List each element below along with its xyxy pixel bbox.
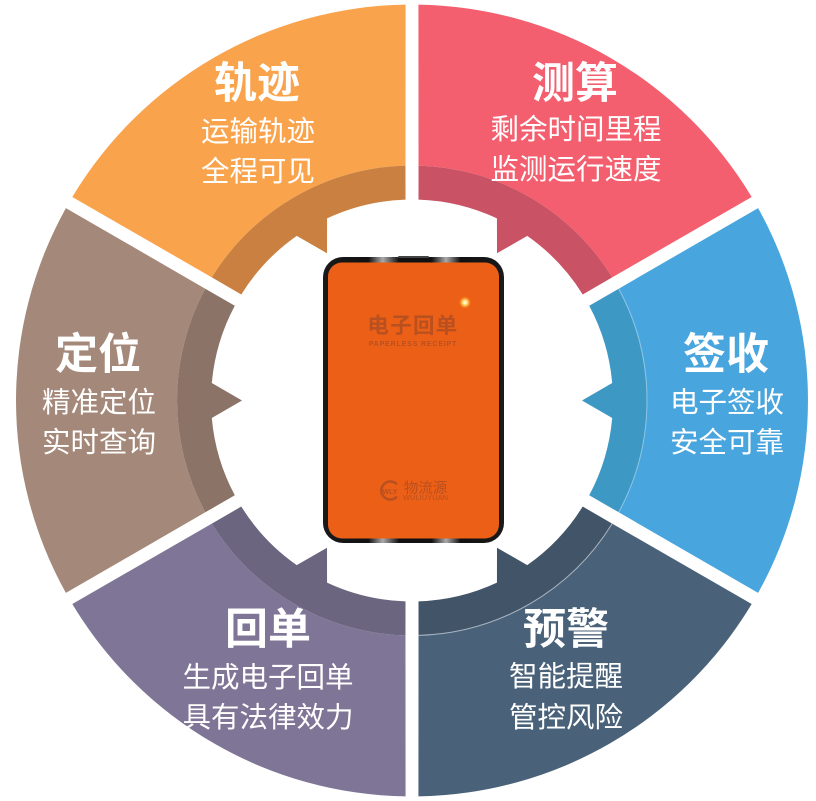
text: 运输轨迹 全程可见	[201, 116, 315, 188]
sector shape: 预警	[349, 483, 777, 801]
text: 剩余时间里程 监测运行速度: 剩余时间里程	[490, 114, 662, 146]
panel: 签收 sector	[582, 208, 808, 593]
panel: 轨迹 sector	[47, 0, 475, 318]
heading: 签收: 签收	[683, 331, 769, 379]
arrow ring: 测算	[400, 141, 626, 309]
heading: 轨迹: 轨迹	[214, 60, 300, 108]
panel: 测算 sector	[349, 0, 777, 318]
text: 电子签收 安全可靠: 安全可靠	[670, 427, 784, 459]
device face	[328, 262, 499, 538]
heading: 预警: 预警	[523, 606, 609, 654]
indicator light	[458, 296, 472, 309]
heading: 定位: 定位	[55, 331, 141, 379]
text: 电子签收 安全可靠: 电子签收	[670, 387, 784, 419]
text: 生成电子回单 具有法律效力: 具有法律效力	[182, 702, 354, 734]
arrow ring: 回单	[198, 492, 424, 660]
sector shape: 回单	[47, 483, 475, 801]
text: 智能提醒 管控风险: 智能提醒	[509, 661, 623, 693]
text: 运输轨迹 全程可见: 运输轨迹	[201, 116, 315, 148]
logo: WLY mark	[381, 482, 398, 499]
logo text: 物流源	[404, 480, 448, 497]
arrow ring: 定位	[177, 289, 242, 512]
text: 智能提醒 管控风险	[509, 661, 623, 734]
device: orange electronic receipt terminal	[323, 256, 504, 543]
text: 精准定位 实时查询	[42, 387, 156, 459]
text: 剩余时间里程 监测运行速度	[490, 114, 662, 186]
text: 剩余时间里程 监测运行速度: 监测运行速度	[490, 154, 662, 186]
sector shape: 签收	[619, 208, 808, 593]
text: 智能提醒 管控风险: 管控风险	[509, 702, 623, 734]
arrow ring: 签收	[582, 289, 647, 512]
device bezel	[323, 257, 504, 543]
text: 生成电子回单 具有法律效力: 生成电子回单	[182, 662, 354, 694]
heading: 回单: 回单	[225, 606, 311, 654]
panel: 定位 sector	[16, 208, 242, 593]
panel: 预警 sector	[349, 483, 777, 801]
device title: 电子回单	[367, 314, 459, 338]
sector shape: 测算	[349, 0, 777, 318]
arrow ring: 预警	[400, 492, 626, 660]
logo: WLY mark: WLY	[383, 489, 398, 496]
device top button	[398, 256, 429, 258]
text: 生成电子回单 具有法律效力	[182, 662, 354, 734]
sector shape: 轨迹	[47, 0, 475, 318]
sector shape: 定位	[16, 208, 205, 593]
text: 精准定位 实时查询: 精准定位	[42, 387, 156, 419]
arrow ring: 轨迹	[198, 141, 424, 309]
text: 运输轨迹 全程可见: 全程可见	[201, 156, 315, 188]
panel: 回单 sector	[47, 483, 475, 801]
text: 电子签收 安全可靠	[670, 387, 784, 459]
text: 精准定位 实时查询: 实时查询	[42, 427, 156, 459]
logo text: WULIUYUAN	[403, 493, 448, 502]
device subtitle: PAPERLESS RECEIPT	[369, 341, 457, 348]
heading: 测算: 测算	[532, 60, 618, 108]
